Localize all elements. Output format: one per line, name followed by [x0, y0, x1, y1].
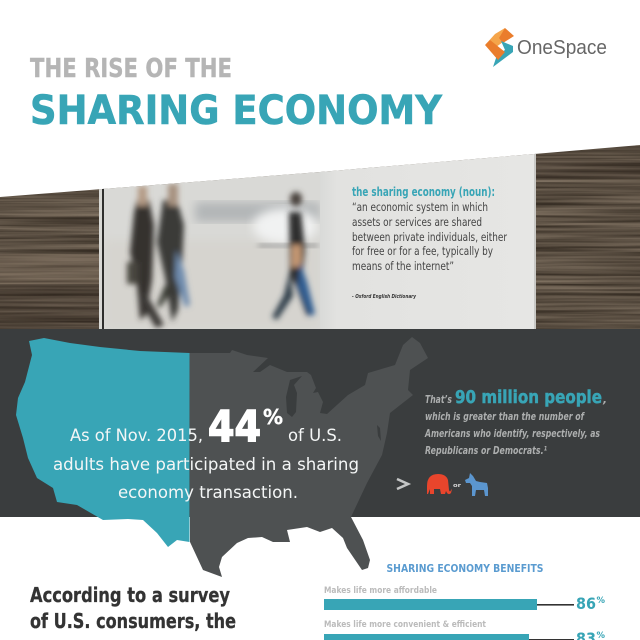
headline statistic: 44 percent — [53, 402, 359, 503]
callout: 90 million people: which is greater than the number of — [425, 411, 585, 423]
definition text: between private individuals, either — [352, 230, 507, 244]
title: the rise of the sharing economy: THE RISE OF THE — [30, 54, 232, 84]
headline statistic: 44 percent: adults have participated in a sharing — [53, 455, 359, 475]
map: Chesapeake bay — [377, 425, 381, 441]
US map — [16, 337, 428, 577]
headline statistic: 44 percent: % — [263, 405, 283, 429]
book spine edge — [99, 188, 104, 329]
bar: makes life more affordable 86%: % — [596, 596, 605, 606]
hero band: wood table with open book — [0, 140, 640, 330]
callout: 90 million people: That’s — [425, 394, 452, 406]
title: the rise of the sharing economy — [30, 54, 443, 134]
bar: makes life more affordable 86% — [324, 586, 605, 613]
callout: 90 million people: , — [602, 394, 607, 406]
headline statistic: 44 percent: 44 — [208, 402, 261, 452]
title: the rise of the sharing economy: SHARING ECONOMY — [30, 88, 443, 134]
bar: makes life more convenient and efficient 83%: Makes life more convenient & efficient — [324, 620, 486, 630]
callout: 90 million people: 90 million people — [455, 388, 602, 408]
dark statistic panel — [0, 329, 640, 517]
definition text: the sharing economy (noun): — [352, 185, 495, 199]
page edge — [534, 150, 536, 330]
logo: OneSpace — [485, 28, 607, 67]
headline statistic: 44 percent: economy transaction. — [118, 483, 298, 503]
map: eastern states in grey — [190, 337, 428, 577]
map: lake Michigan — [286, 376, 302, 417]
logo: OneSpace: OneSpace — [517, 37, 607, 59]
photo: blurred pedestrians — [104, 172, 320, 329]
definition text: assets or services are shared — [352, 215, 482, 229]
definition text: for free or for a fee, typically by — [352, 244, 493, 258]
headline statistic: 44 percent: of U.S. — [288, 426, 342, 446]
bar: makes life more affordable 86%: Makes life more affordable — [324, 586, 437, 596]
book page — [320, 150, 534, 330]
icon: democrat donkey — [465, 473, 488, 496]
icon: republican elephant — [427, 474, 452, 494]
definition text: “an economic system in which — [352, 200, 488, 214]
chart title: SHARING ECONOMY BENEFITS — [386, 563, 544, 575]
headline statistic: 44 percent: As of Nov. 2015, — [70, 426, 203, 446]
wood background — [0, 140, 640, 330]
bar: makes life more convenient and efficient 83% — [324, 620, 605, 640]
survey intro heading: According to a survey — [30, 583, 230, 607]
survey intro heading — [30, 583, 236, 633]
chart: sharing economy benefits — [324, 563, 605, 640]
label: or: or — [453, 483, 461, 489]
bar: makes life more affordable 86%: 86 — [576, 594, 596, 613]
callout: 90 million people: Republicans or Democrats.¹ — [425, 445, 547, 457]
callout: 90 million people — [424, 388, 607, 457]
definition text — [352, 185, 507, 300]
definition text: - Oxford English Dictionary — [352, 294, 417, 300]
map: western states in teal — [16, 338, 190, 547]
definition text: means of the internet” — [352, 259, 454, 273]
icon: greater-than sign — [397, 479, 408, 489]
survey intro heading: of U.S. consumers, the — [30, 609, 236, 633]
